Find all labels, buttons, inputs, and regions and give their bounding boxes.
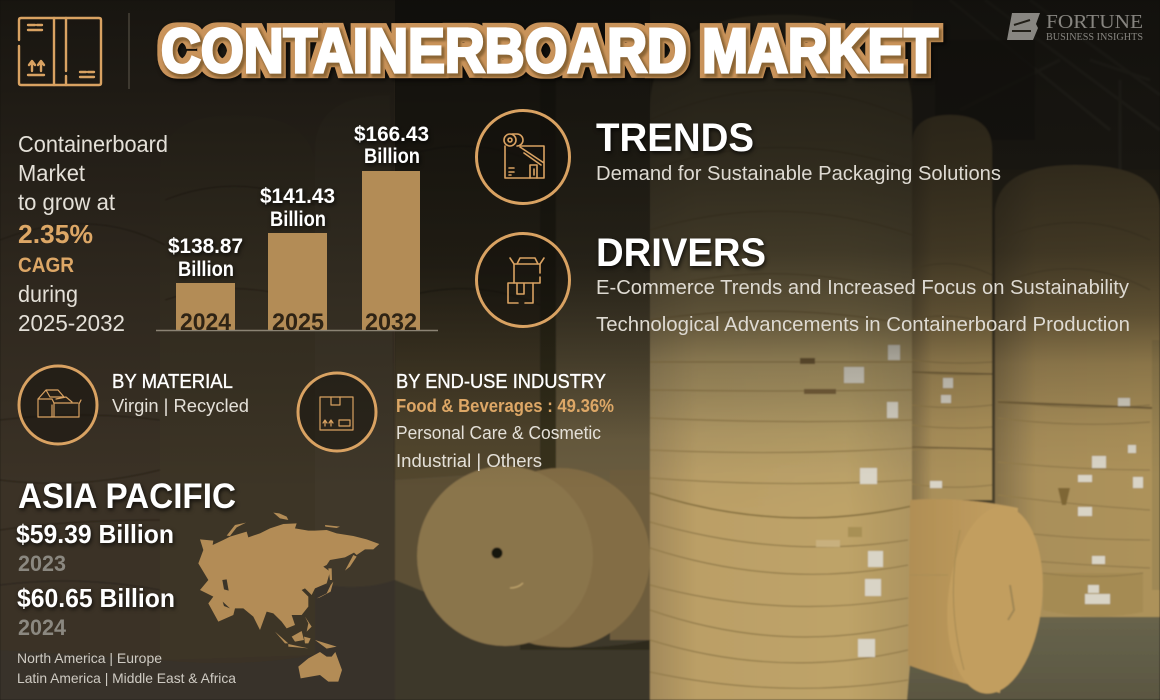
bar 2025 bbox=[268, 233, 327, 330]
wheels leaning bbox=[417, 466, 650, 650]
other regions: Latin America | Middle East & Africa bbox=[17, 670, 236, 686]
right floor bbox=[905, 600, 1160, 700]
value labels: $138.87 bbox=[168, 235, 243, 258]
other regions: North America | Europe bbox=[17, 650, 162, 666]
by material text: BY MATERIAL bbox=[112, 371, 233, 393]
year labels: 2025 bbox=[272, 309, 324, 336]
value labels: $141.43 bbox=[260, 185, 335, 208]
2023 year: 2023 bbox=[18, 551, 66, 576]
by material text bbox=[112, 371, 249, 416]
value labels: Billion bbox=[364, 145, 420, 168]
value labels bbox=[168, 123, 429, 281]
bar 2032 bbox=[362, 171, 420, 330]
CAGR statement: Market bbox=[18, 160, 86, 186]
logo mark bbox=[1007, 13, 1040, 40]
by end-use industry text bbox=[396, 371, 614, 471]
by end-use industry text: Personal Care & Cosmetic bbox=[396, 423, 601, 443]
icon: material boxes bbox=[19, 366, 97, 444]
icon: drivers parcels bbox=[476, 234, 570, 326]
year labels: 2032 bbox=[365, 309, 417, 336]
header divider bbox=[128, 13, 130, 89]
icon: labelled carton bbox=[298, 373, 376, 451]
year labels: 2024 bbox=[180, 309, 232, 336]
CAGR statement bbox=[18, 131, 168, 336]
CAGR statement: CAGR bbox=[18, 254, 74, 277]
title: CONTAINERBOARD MARKET bbox=[161, 17, 938, 86]
upper right structure bbox=[912, 0, 1160, 170]
logo wordmark: FORTUNE bbox=[1046, 11, 1143, 33]
bar 2024 bbox=[176, 283, 235, 330]
other regions bbox=[17, 650, 236, 686]
CAGR statement: to grow at bbox=[18, 189, 116, 215]
map: Asia Pacific bbox=[198, 513, 379, 682]
lying roll bbox=[908, 499, 1052, 698]
region heading: ASIA PACIFIC bbox=[18, 477, 236, 516]
by end-use industry text: Food & Beverages : 49.36% bbox=[396, 396, 614, 416]
axis bbox=[156, 330, 438, 332]
year labels bbox=[180, 309, 417, 336]
CAGR statement: during bbox=[18, 281, 78, 307]
drivers text: E-Commerce Trends and Increased Focus on Sustainability bbox=[596, 277, 1129, 299]
CAGR statement: 2.35% bbox=[18, 219, 93, 249]
trends text: Demand for Sustainable Packaging Solutions bbox=[596, 163, 1001, 185]
drivers text: Technological Advancements in Containerboard Production bbox=[596, 314, 1130, 336]
logo tagline: BUSINESS INSIGHTS bbox=[1046, 32, 1143, 43]
2023 value: $59.39 Billion bbox=[16, 519, 174, 549]
regional block: Asia Pacific bbox=[16, 477, 236, 686]
by end-use industry text: Industrial | Others bbox=[396, 451, 542, 471]
CAGR statement: 2025-2032 bbox=[18, 310, 125, 336]
value labels: $166.43 bbox=[354, 123, 429, 146]
drivers heading: DRIVERS bbox=[596, 231, 766, 275]
logo: Fortune Business Insights bbox=[1007, 11, 1143, 43]
icon: flattened carton box bbox=[19, 18, 101, 85]
2024 year: 2024 bbox=[18, 615, 67, 640]
icon: trends roll machine bbox=[476, 110, 570, 204]
by material text: Virgin | Recycled bbox=[112, 396, 249, 416]
bar chart: market size bbox=[156, 123, 438, 336]
CAGR statement: Containerboard bbox=[18, 131, 168, 157]
value labels: Billion bbox=[270, 208, 326, 231]
big foreground roll bbox=[650, 15, 912, 700]
left stacked rolls bbox=[0, 0, 650, 700]
drivers text bbox=[596, 277, 1130, 336]
trends heading: TRENDS bbox=[596, 116, 754, 160]
value labels: Billion bbox=[178, 258, 234, 281]
by end-use industry text: BY END-USE INDUSTRY bbox=[396, 371, 606, 393]
right stacked rolls bbox=[912, 115, 1160, 617]
2024 value: $60.65 Billion bbox=[17, 583, 175, 613]
